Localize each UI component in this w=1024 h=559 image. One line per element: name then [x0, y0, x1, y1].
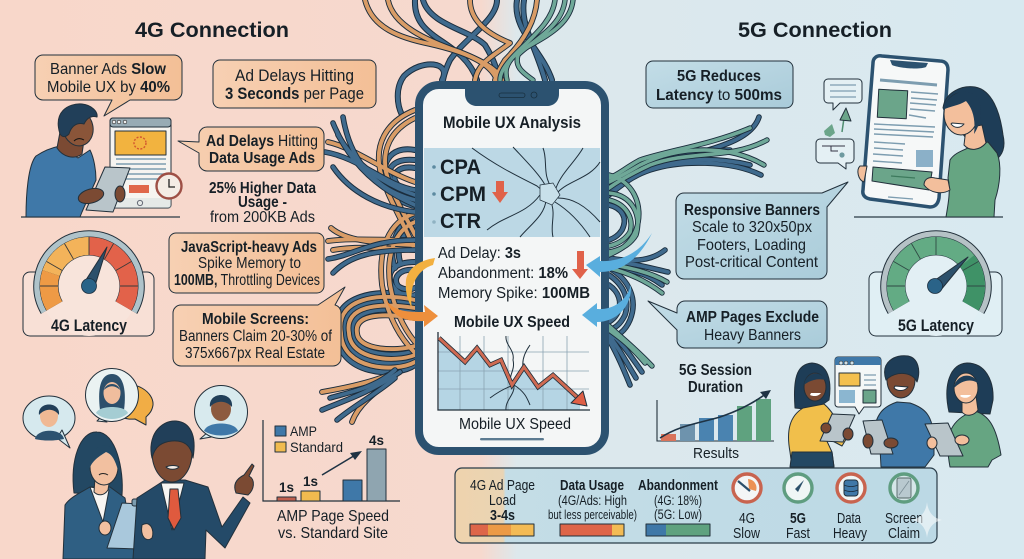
legend: abandonment: (5G: Low) — [654, 507, 702, 522]
legend icon: 5G fast: Fast — [786, 525, 811, 542]
callout: Mobile Screens — [173, 287, 345, 366]
legend panel — [455, 468, 937, 543]
chat bubbles with faces — [23, 368, 248, 448]
callout: 5G Reduces Latency: Latency to 500ms — [656, 87, 782, 104]
head — [60, 107, 96, 149]
bar chart: AMP vs Standard: 1s — [279, 479, 294, 495]
callout: Responsive Banners: Scale to 320x50px — [692, 219, 812, 236]
bubble: man left — [23, 396, 75, 448]
chart: speed decline: Mobile UX Speed — [454, 314, 570, 331]
callout: Mobile Screens: 375x667px Real Estate — [185, 345, 325, 362]
notch — [465, 88, 559, 106]
body — [946, 142, 1000, 217]
legend: 4G ad page load: Load — [489, 493, 516, 509]
panel: metrics with cracked glass — [424, 147, 600, 237]
panel: metrics with cracked glass: CPA — [440, 156, 481, 179]
ground line — [854, 216, 1003, 218]
stats — [438, 245, 590, 302]
ground line — [21, 216, 180, 218]
illustration: businessman pointing — [133, 421, 254, 559]
home bar — [480, 438, 544, 440]
callout: Responsive Banners: Footers, Loading — [697, 237, 806, 254]
bubble: man right — [194, 386, 248, 439]
legend icon: 5G fast — [784, 474, 812, 542]
bubble: orange behind — [117, 384, 153, 425]
stats: Ad Delay: 3s — [438, 245, 521, 262]
bar chart: AMP vs Standard: 4s — [369, 432, 384, 448]
tilted phone — [863, 56, 948, 207]
illustration: woman holding phone — [816, 56, 1004, 217]
bar chart: AMP vs Standard: vs. Standard Site — [278, 525, 388, 542]
arrow: orange into phone — [386, 300, 438, 327]
person: woman in yellow — [789, 363, 855, 467]
callout: Responsive Banners — [676, 182, 848, 279]
small chat bubbles — [816, 79, 862, 169]
text: 25% Higher Data Usage: from 200KB Ads — [210, 209, 315, 226]
person: man in blue — [863, 356, 934, 467]
callout: JavaScript-heavy Ads: JavaScript-heavy Ads — [181, 239, 317, 256]
bar chart: AMP vs Standard: Standard — [290, 439, 343, 455]
callout: AMP Pages Exclude: AMP Pages Exclude — [686, 309, 819, 326]
callout: Ad Delays 3 Seconds: Ad Delays Hitting — [235, 67, 354, 85]
arrow: blue into phone lower — [582, 285, 631, 327]
window bubble — [835, 357, 881, 414]
legend icon: 5G fast: 5G — [790, 510, 806, 527]
bar chart: 5G session duration: Duration — [688, 379, 743, 396]
legend icon: 4G slow: 4G — [739, 510, 755, 527]
illustration: frustrated man with tablet — [21, 104, 182, 217]
title: 4G Connection: 4G Connection — [135, 19, 289, 42]
bubble: woman — [86, 368, 138, 422]
arrow: blue into phone top — [586, 233, 652, 277]
legend icon: data heavy: Data — [837, 510, 861, 527]
neck — [57, 132, 84, 157]
phone body — [419, 85, 605, 451]
stats: Abandonment: 18% — [438, 265, 568, 282]
bar chart: AMP vs Standard: AMP — [290, 423, 317, 439]
gauge: 4G latency: 4G Latency — [51, 316, 127, 335]
heading: Mobile UX Analysis — [443, 113, 581, 132]
callout: Responsive Banners: Responsive Banners — [684, 202, 820, 219]
body — [26, 146, 96, 217]
clock — [156, 174, 182, 198]
hair — [58, 104, 97, 137]
gauge: 5G latency — [869, 234, 1002, 336]
callout: Ad Delays Data Usage: Ad Delays Hitting — [206, 133, 318, 150]
gauge: 5G latency: 5G Latency — [898, 316, 974, 335]
cables: tangled wires — [322, 0, 767, 422]
callout: 5G Reduces Latency: 5G Reduces — [677, 68, 761, 85]
callout: 5G Reduces Latency — [646, 61, 793, 108]
legend: 4G ad page load — [470, 478, 535, 536]
illustration: three people with tablets — [789, 356, 1001, 467]
title: 5G Connection: 5G Connection — [738, 19, 892, 42]
panel: metrics with cracked glass: CPM — [440, 183, 486, 206]
legend icon: data heavy — [833, 474, 867, 542]
smile — [951, 123, 964, 127]
hands — [924, 177, 950, 193]
bar chart: AMP vs Standard — [263, 420, 400, 542]
legend: abandonment: Abandonment — [638, 478, 718, 494]
neck — [964, 125, 986, 149]
hair back — [943, 87, 1004, 160]
illustration: businesswoman with clipboard — [63, 432, 157, 559]
legend: abandonment — [638, 478, 718, 536]
callout: Responsive Banners: Post-critical Content — [685, 254, 819, 271]
person: woman in green — [925, 363, 1001, 467]
callout: Ad Delays 3 Seconds — [213, 60, 376, 108]
fringe — [943, 92, 981, 134]
legend: 4G ad page load: 4G Ad Page — [470, 478, 535, 494]
face — [944, 93, 978, 135]
legend icon: 4G slow — [733, 474, 761, 542]
legend: data usage: (4G/Ads: High — [558, 493, 627, 508]
callout: JavaScript-heavy Ads: 100MB, Throttling Devices — [174, 272, 320, 289]
legend: data usage: Data Usage — [560, 478, 624, 494]
bar chart: 5G session duration: 5G Session — [679, 362, 752, 379]
phone: Mobile UX Analysis — [419, 85, 605, 451]
callout: Banner Ads Slow — [35, 55, 182, 116]
arrow: yellow into phone — [406, 258, 435, 308]
bar chart: AMP vs Standard: 1s — [303, 473, 318, 489]
callout: JavaScript-heavy Ads: Spike Memory to — [198, 255, 301, 272]
callout: Ad Delays Data Usage: Data Usage Ads — [209, 150, 315, 167]
callout: AMP Pages Exclude: Heavy Banners — [704, 327, 801, 344]
callout: AMP Pages Exclude — [648, 301, 827, 348]
chart: speed decline — [438, 314, 590, 410]
callout: Banner Ads Slow: Banner Ads Slow — [50, 61, 167, 78]
tablet and hands — [86, 167, 130, 212]
gauge: 4G latency — [23, 234, 154, 336]
legend icon: screen claim: Claim — [888, 525, 920, 542]
legend: 4G ad page load: 3-4s — [490, 508, 515, 524]
legend icon: screen claim: Screen — [885, 510, 923, 527]
callout: Ad Delays 3 Seconds: 3 Seconds per Page — [225, 85, 364, 103]
legend: abandonment: (4G: 18%) — [654, 493, 702, 508]
text: 25% Higher Data Usage: 25% Higher Data — [209, 180, 316, 197]
browser window with ad — [110, 118, 171, 208]
bar chart: AMP vs Standard: AMP Page Speed — [277, 508, 389, 525]
callout: Mobile Screens: Mobile Screens: — [202, 311, 309, 328]
callout: JavaScript-heavy Ads — [169, 233, 324, 293]
callout: Banner Ads Slow: Mobile UX by 40% — [47, 79, 170, 96]
legend icon: 4G slow: Slow — [733, 525, 760, 542]
panel: metrics with cracked glass: CTR — [440, 210, 481, 233]
bar chart: 5G session duration — [657, 362, 774, 462]
legend icon: screen claim — [885, 474, 923, 542]
legend: data usage — [548, 478, 637, 536]
stats: Memory Spike: 100MB — [438, 285, 590, 302]
caption: Mobile UX Speed — [459, 416, 571, 433]
text: 25% Higher Data Usage — [209, 180, 316, 226]
legend icon: data heavy: Heavy — [833, 525, 867, 542]
callout: Ad Delays Data Usage — [178, 127, 324, 171]
legend: data usage: but less perceivable) — [548, 508, 637, 522]
bar chart: 5G session duration: Results — [693, 445, 739, 462]
sparkle watermark — [912, 502, 942, 538]
callout: Mobile Screens: Banners Claim 20-30% of — [179, 328, 333, 345]
text: 25% Higher Data Usage: Usage - — [238, 194, 287, 211]
